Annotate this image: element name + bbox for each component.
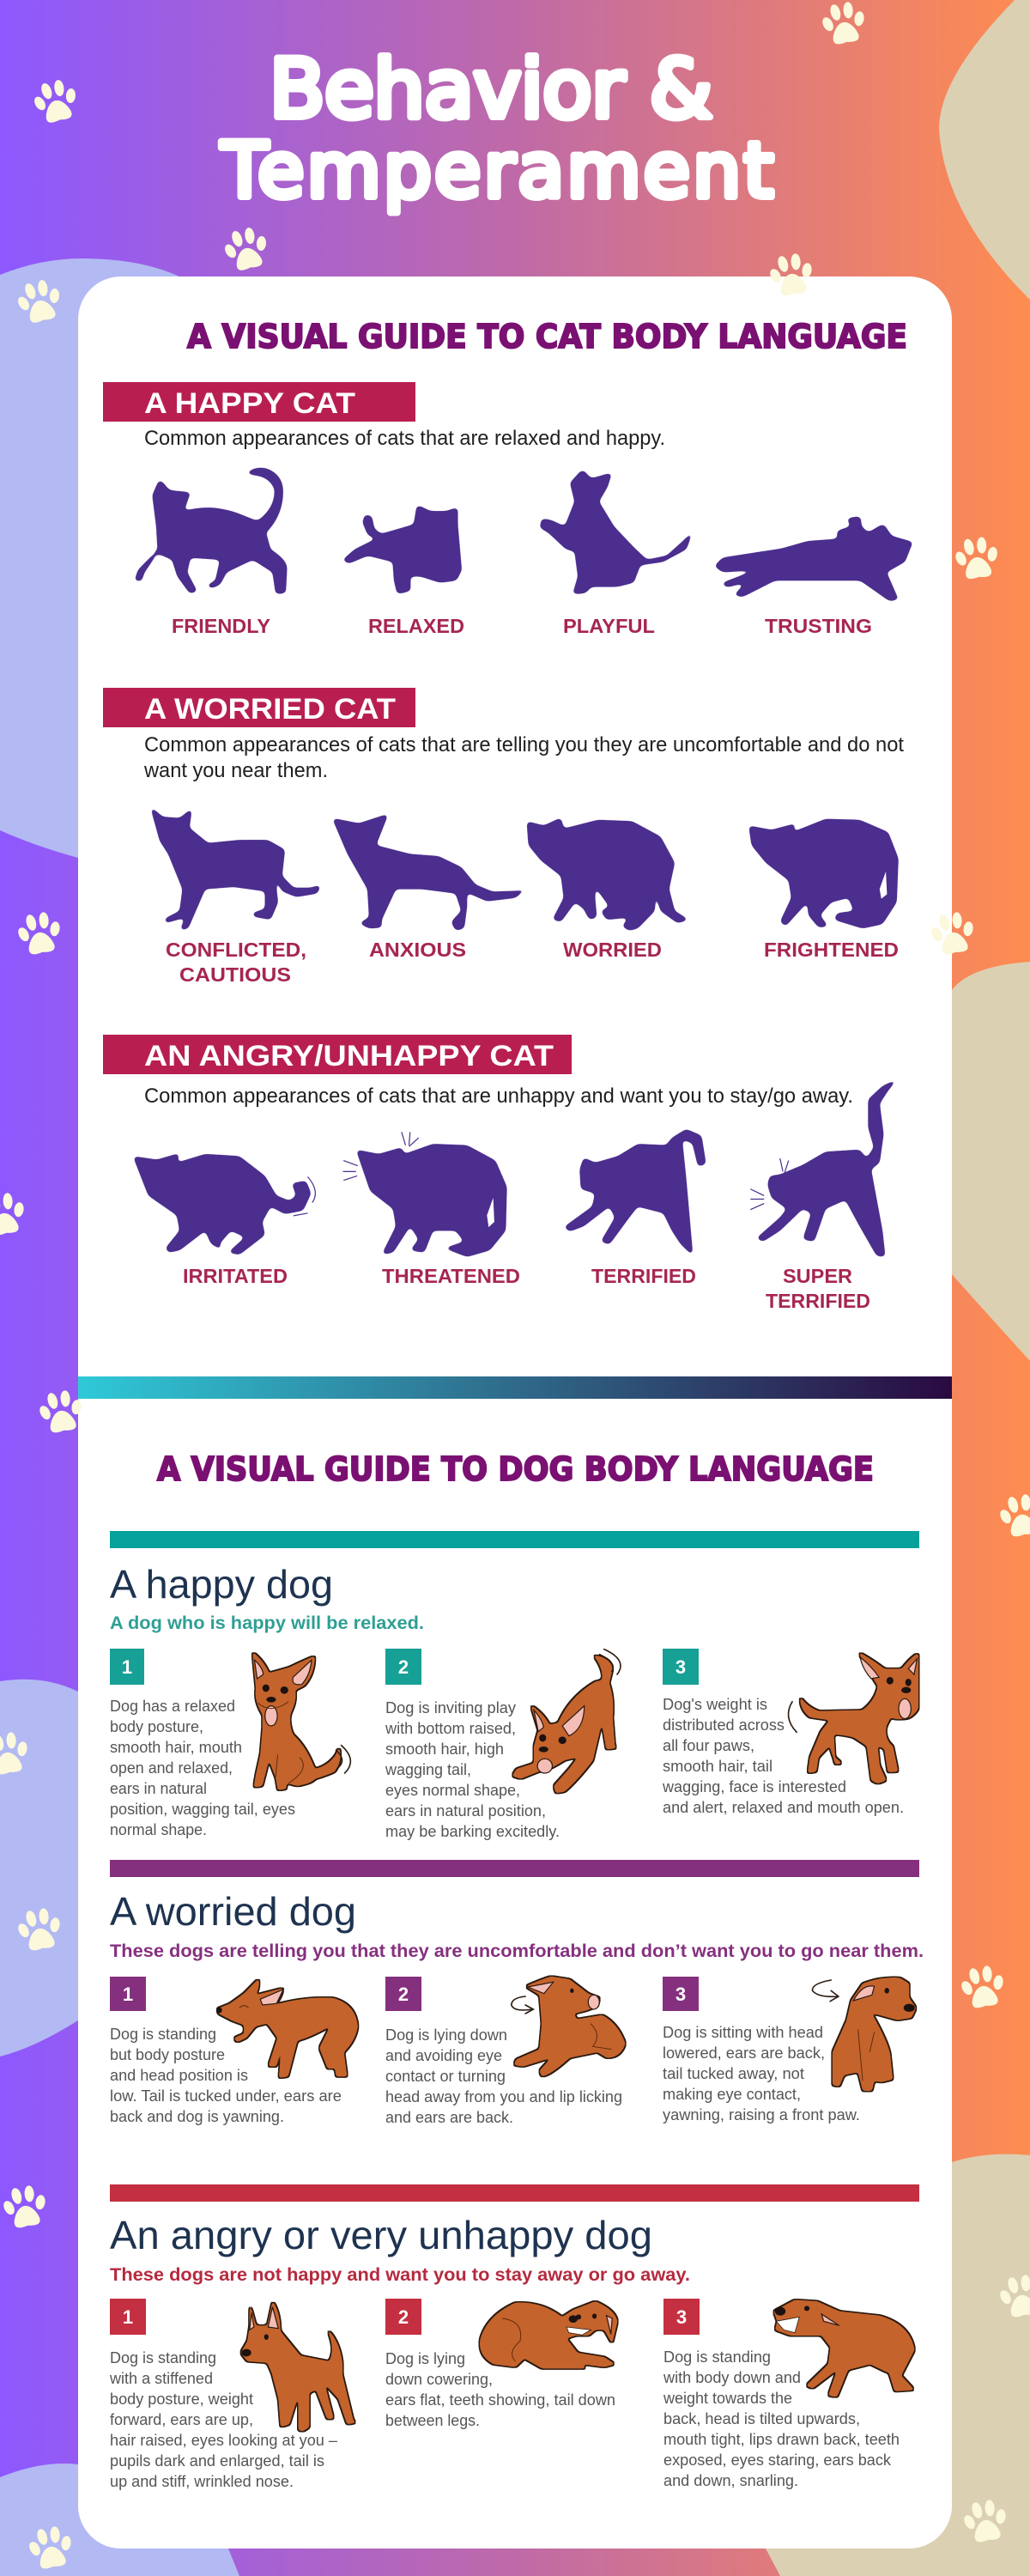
text: happy dog 1 <box>110 1698 295 1838</box>
labels: happy cats: FRIENDLY <box>172 615 270 637</box>
icon: irritated cat <box>133 1153 315 1255</box>
text: worried cat description: want you near them. <box>143 759 328 782</box>
heading: a worried dog: A worried dog <box>110 1889 356 1934</box>
icon: playful cat <box>540 469 694 594</box>
text: happy dog 2: ears in natural position, <box>385 1802 546 1820</box>
badge: worried 3: 3 <box>676 1984 686 2005</box>
labels: happy cats: PLAYFUL <box>563 615 655 637</box>
badge: angry 1: 1 <box>123 2306 133 2328</box>
labels: worried cats: WORRIED <box>563 939 662 961</box>
heading: cat guide: A VISUAL GUIDE TO CAT BODY LANGUAGE <box>187 318 907 355</box>
badge: angry 2 <box>385 2299 421 2335</box>
labels: happy cats: TRUSTING <box>765 615 872 637</box>
text: angry cat description: Common appearances of cats that are unhappy and want you to stay/go away. <box>144 1084 853 1108</box>
text: angry dog 2: down cowering, <box>385 2371 493 2388</box>
icon: stiff standing dog <box>240 2300 361 2432</box>
blob: lavender middle left <box>0 1680 94 2057</box>
blob: lavender lower left <box>0 2464 239 2576</box>
section: a happy cat <box>103 382 912 637</box>
text: angry dog 2: ears flat, teeth showing, tail down <box>385 2391 615 2409</box>
text: happy dog 1: Dog has a relaxed <box>110 1698 235 1715</box>
text: angry dog 1: body posture, weight <box>110 2391 253 2408</box>
text: angry dog 3: Dog is standing <box>663 2348 771 2366</box>
icon: yawning dog <box>216 1978 358 2078</box>
badge: worried 1: 1 <box>123 1984 133 2005</box>
badge: angry 1 <box>110 2299 146 2335</box>
text: happy dog 3: distributed across <box>663 1716 785 1734</box>
text: happy dog 2 <box>385 1699 560 1840</box>
text: happy dog 3: smooth hair, tail <box>663 1758 772 1775</box>
text: angry dog 1: Dog is standing <box>110 2349 216 2366</box>
text: happy dog 1: normal shape. <box>110 1821 207 1838</box>
text: angry dog 2: between legs. <box>385 2412 480 2429</box>
text: happy dog 1: ears in natural <box>110 1780 207 1797</box>
text: happy dog 3: wagging, face is interested <box>662 1778 846 1795</box>
icon: relaxed cat <box>342 504 462 594</box>
icon: cowering dog <box>480 2301 617 2368</box>
banner: a happy cat <box>103 382 415 422</box>
icon: sitting dog looking away <box>812 1978 916 2091</box>
icon: standing happy dog <box>788 1651 918 1783</box>
text: angry dog 3: with body down and <box>663 2369 801 2386</box>
text: happy dog 2: smooth hair, high <box>385 1741 504 1758</box>
icon: sitting happy dog <box>252 1651 350 1790</box>
text: angry dog 1 <box>109 2349 337 2490</box>
badge: worried 2 <box>385 1977 421 2011</box>
text: angry dog 1: pupils dark and enlarged, tail is <box>110 2452 324 2470</box>
text: angry dog 3: back, head is tilted upwards, <box>663 2410 860 2427</box>
text: happy dog 2: Dog is inviting play <box>385 1699 516 1716</box>
labels: angry cats: IRRITATED <box>183 1265 288 1287</box>
title: Temperament <box>221 126 773 215</box>
text: happy cat description: Common appearances of cats that are relaxed and happy. <box>144 427 665 450</box>
text: angry dog 3: and down, snarling. <box>663 2472 798 2489</box>
icon: terrified cat <box>564 1129 706 1256</box>
banner: a happy cat: A HAPPY CAT <box>144 387 355 420</box>
text: worried dog 1: back and dog is yawning. <box>110 2108 284 2125</box>
text: happy dog 2: with bottom raised, <box>385 1720 516 1737</box>
text: happy dog 1: body posture, <box>110 1718 203 1735</box>
badge: happy 3: 3 <box>676 1656 686 1678</box>
icon: threatened cat <box>343 1132 507 1257</box>
text: angry dog 2: Dog is lying <box>385 2350 465 2367</box>
blob: beige lower right <box>766 2154 1030 2576</box>
icon: worried cat <box>527 817 689 931</box>
banner: an angry cat: AN ANGRY/UNHAPPY CAT <box>144 1040 554 1072</box>
subheading: worried dog: These dogs are telling you that they are uncomfortable and don’t want you to go near them. <box>110 1941 924 1961</box>
text: worried dog 2 <box>385 2026 622 2126</box>
badge: happy 2: 2 <box>398 1656 409 1678</box>
badge: angry 2: 2 <box>398 2306 409 2328</box>
bar: red <box>110 2184 919 2202</box>
text: angry dog 1: hair raised, eyes looking at you – <box>110 2432 337 2449</box>
heading: an angry dog: An angry or very unhappy dog <box>110 2213 652 2257</box>
text: happy dog 3 <box>662 1696 904 1816</box>
text: happy dog 1: position, wagging tail, eyes <box>110 1801 295 1818</box>
text: worried dog 1: low. Tail is tucked under, ears are <box>110 2087 342 2105</box>
text: angry dog 3: exposed, eyes staring, ears back <box>663 2451 892 2469</box>
labels: worried cats: ANXIOUS <box>369 939 466 961</box>
text: angry dog 3 <box>663 2348 900 2489</box>
heading: dog guide: A VISUAL GUIDE TO DOG BODY LANGUAGE <box>157 1450 874 1488</box>
icon: snarling dog <box>773 2300 915 2397</box>
badge: happy 2 <box>385 1649 421 1685</box>
labels: happy cats: RELAXED <box>368 615 464 637</box>
text: happy dog 3: all four paws, <box>663 1737 754 1754</box>
text: angry dog 1: up and stiff, wrinkled nose. <box>110 2473 294 2490</box>
labels: angry cats <box>183 1265 870 1312</box>
icon: friendly cat <box>135 468 287 594</box>
text: worried dog 1 <box>110 2026 342 2125</box>
text: angry dog 3: weight towards the <box>663 2390 792 2407</box>
text: worried dog 3 <box>663 2024 860 2123</box>
subheading: happy dog: A dog who is happy will be relaxed. <box>110 1613 424 1633</box>
text: happy dog 3: and alert, relaxed and mouth open. <box>663 1799 904 1816</box>
title <box>221 43 773 215</box>
labels: worried cats: FRIGHTENED <box>764 939 899 961</box>
labels: angry cats: TERRIFIED <box>766 1290 870 1312</box>
labels: angry cats: TERRIFIED <box>591 1265 696 1287</box>
badge: angry 3 <box>663 2299 700 2335</box>
text: angry dog 1: forward, ears are up, <box>110 2411 253 2428</box>
blob: beige top right <box>939 0 1030 300</box>
text: worried dog 2: head away from you and lip licking <box>385 2088 622 2105</box>
section: a worried dog <box>110 1860 924 2126</box>
section: an angry cat <box>103 1035 899 1312</box>
text: worried dog 3: tail tucked away, not <box>663 2065 804 2082</box>
banner: an angry cat <box>103 1035 572 1074</box>
blob: lavender upper left <box>0 258 185 858</box>
text: happy dog 2: eyes normal shape, <box>385 1782 520 1799</box>
banner: a worried cat: A WORRIED CAT <box>144 693 396 726</box>
labels: angry cats: SUPER <box>783 1265 852 1287</box>
badge: worried 1 <box>110 1977 146 2011</box>
labels: worried cats: CONFLICTED, <box>166 939 306 961</box>
bar: teal <box>110 1531 919 1548</box>
section: a worried cat <box>103 688 904 986</box>
labels: happy cats <box>172 615 872 637</box>
labels: worried cats <box>166 939 899 986</box>
icon: play bow dog <box>512 1649 621 1793</box>
section: an angry dog <box>109 2184 919 2490</box>
gradient divider bar <box>78 1376 952 1399</box>
text: happy dog 2: may be barking excitedly. <box>385 1823 560 1840</box>
icon: anxious cat <box>332 814 529 931</box>
blob: beige middle right <box>940 962 1030 1361</box>
text: worried cat description: Common appearances of cats that are telling you they are uncomfortable and do not <box>144 733 904 756</box>
text: worried dog 3: making eye contact, <box>663 2086 801 2103</box>
subheading: angry dog: These dogs are not happy and want you to stay away or go away. <box>110 2265 690 2285</box>
badge: worried 2: 2 <box>398 1984 409 2005</box>
badge: worried 3 <box>663 1977 699 2011</box>
text: worried cat description <box>143 733 904 782</box>
icon: conflicted cat <box>150 805 321 931</box>
icon: lying dog looking away <box>512 1977 626 2076</box>
icon: trusting cat <box>714 516 912 601</box>
text: worried dog 2: contact or turning <box>385 2068 506 2085</box>
text: angry dog 1: with a stiffened <box>109 2370 213 2387</box>
text: worried dog 1: and head position is <box>110 2067 248 2084</box>
icon: frightened cat <box>748 819 899 928</box>
text: happy dog 3: Dog's weight is <box>663 1696 767 1713</box>
labels: angry cats: THREATENED <box>382 1265 520 1287</box>
text: happy dog 1: smooth hair, mouth <box>110 1739 242 1756</box>
bar: purple <box>110 1860 919 1877</box>
labels: worried cats: CAUTIOUS <box>179 963 291 986</box>
text: happy dog 1: open and relaxed, <box>110 1759 233 1777</box>
icon: super terrified cat <box>750 1078 899 1257</box>
text: worried dog 1: Dog is standing <box>110 2026 216 2043</box>
text: worried dog 1: but body posture <box>110 2046 225 2063</box>
section: a happy dog <box>110 1531 919 1840</box>
text: happy dog 2: wagging tail, <box>385 1761 471 1778</box>
main white card <box>78 276 952 2549</box>
badge: happy 1 <box>110 1649 144 1685</box>
banner: a worried cat <box>103 688 415 727</box>
text: worried dog 3: lowered, ears are back, <box>663 2044 825 2062</box>
text: worried dog 3: yawning, raising a front paw. <box>663 2106 860 2123</box>
text: angry dog 2 <box>385 2350 615 2429</box>
title: Behavior & <box>270 43 712 137</box>
badge: angry 3: 3 <box>676 2306 687 2328</box>
text: angry dog 3: mouth tight, lips drawn back, teeth <box>663 2431 900 2448</box>
text: worried dog 2: Dog is lying down <box>385 2026 507 2044</box>
text: worried dog 2: and avoiding eye <box>385 2047 502 2064</box>
badge: happy 3 <box>663 1649 699 1685</box>
text: worried dog 3: Dog is sitting with head <box>663 2024 823 2041</box>
badge: happy 1: 1 <box>122 1656 132 1678</box>
text: worried dog 2: and ears are back. <box>385 2109 513 2126</box>
heading: a happy dog: A happy dog <box>110 1562 333 1607</box>
